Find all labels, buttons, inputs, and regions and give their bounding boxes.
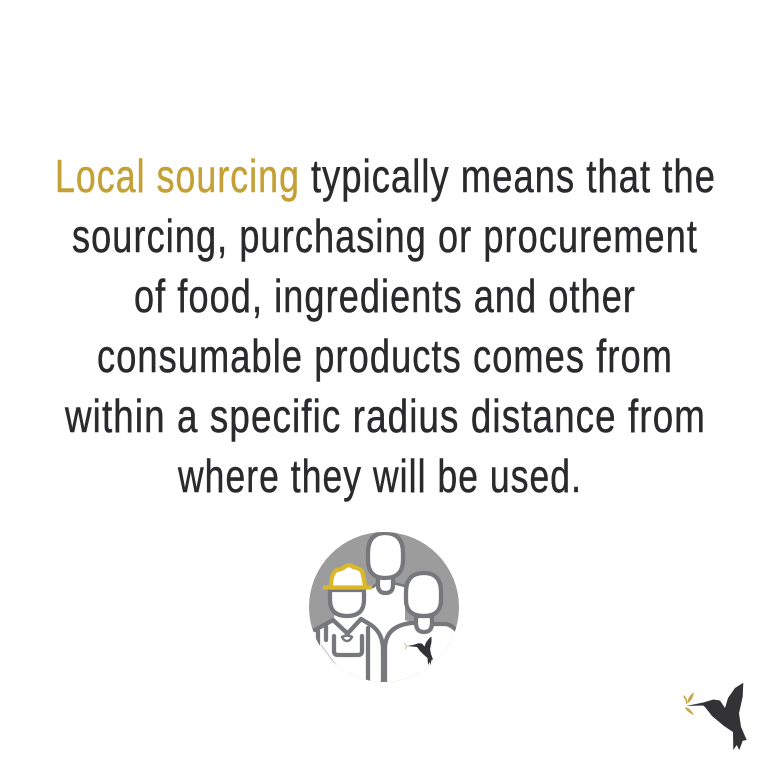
left worker <box>315 590 383 690</box>
white lower area <box>312 584 456 682</box>
definition text block <box>55 150 716 502</box>
back worker <box>368 533 405 593</box>
icon: three workers in grey circle <box>309 532 459 682</box>
line 6: where they will be used. <box>177 450 582 502</box>
right worker <box>385 573 458 682</box>
yellow hard hat <box>323 565 372 588</box>
bird silhouette <box>686 683 747 750</box>
line 3: of food, ingredients and other <box>134 270 636 322</box>
highlighted term: Local sourcing <box>55 150 300 202</box>
icon: hummingbird logo with olive sprig <box>683 683 747 750</box>
olive sprig <box>683 692 694 715</box>
grey circle background <box>309 532 459 682</box>
icon: small hummingbird <box>404 636 433 665</box>
